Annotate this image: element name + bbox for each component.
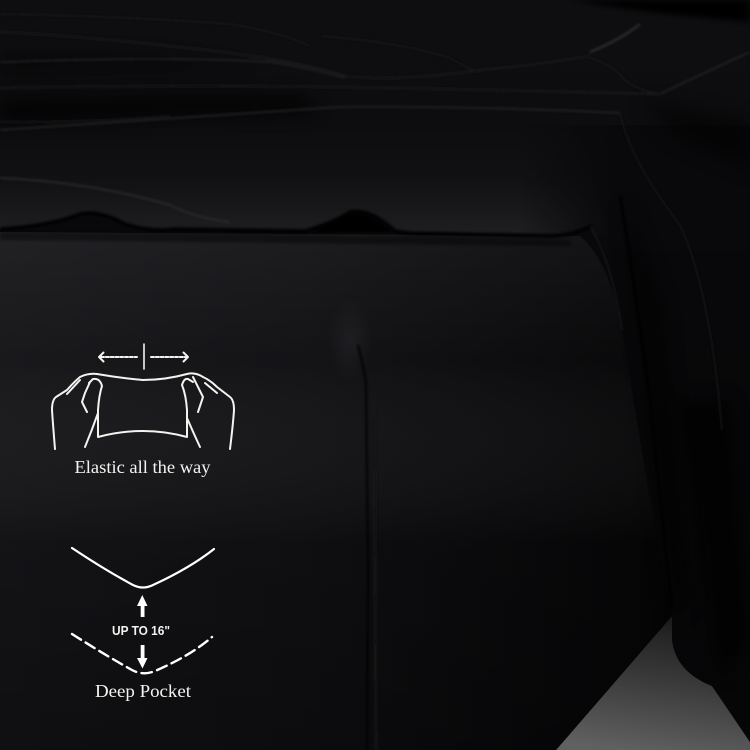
icon: hands stretching elastic sheet: [52, 344, 234, 449]
icon: left hand: [52, 374, 98, 449]
fitted sheet side face: [0, 232, 672, 750]
floor: [556, 616, 750, 750]
top sheet hem: [0, 211, 592, 236]
icon: right arrow: [151, 352, 188, 362]
shadow below hem: [0, 232, 570, 246]
solid upper curve: [72, 548, 214, 588]
fabric folds on the bed: [0, 14, 750, 610]
label: Elastic all the way: Elastic all the way: [74, 457, 210, 477]
dark upper right corner: [570, 0, 750, 22]
icon: deep pocket curves: [72, 548, 214, 673]
icon: stretched fabric: [89, 374, 193, 437]
icon: down arrow: [137, 645, 148, 668]
dashed lower curve: [72, 634, 212, 673]
fitted sheet corner seam: [328, 298, 376, 750]
label: up to 16 inches: UP TO 16": [112, 624, 170, 638]
icon: left arrow: [99, 352, 137, 362]
icon: right hand: [187, 373, 234, 449]
sheet shading fading into the drape: [554, 171, 750, 237]
label: Deep Pocket: Deep Pocket: [95, 681, 191, 701]
icon: centre tick: [143, 344, 145, 369]
icon: up arrow: [137, 595, 148, 617]
